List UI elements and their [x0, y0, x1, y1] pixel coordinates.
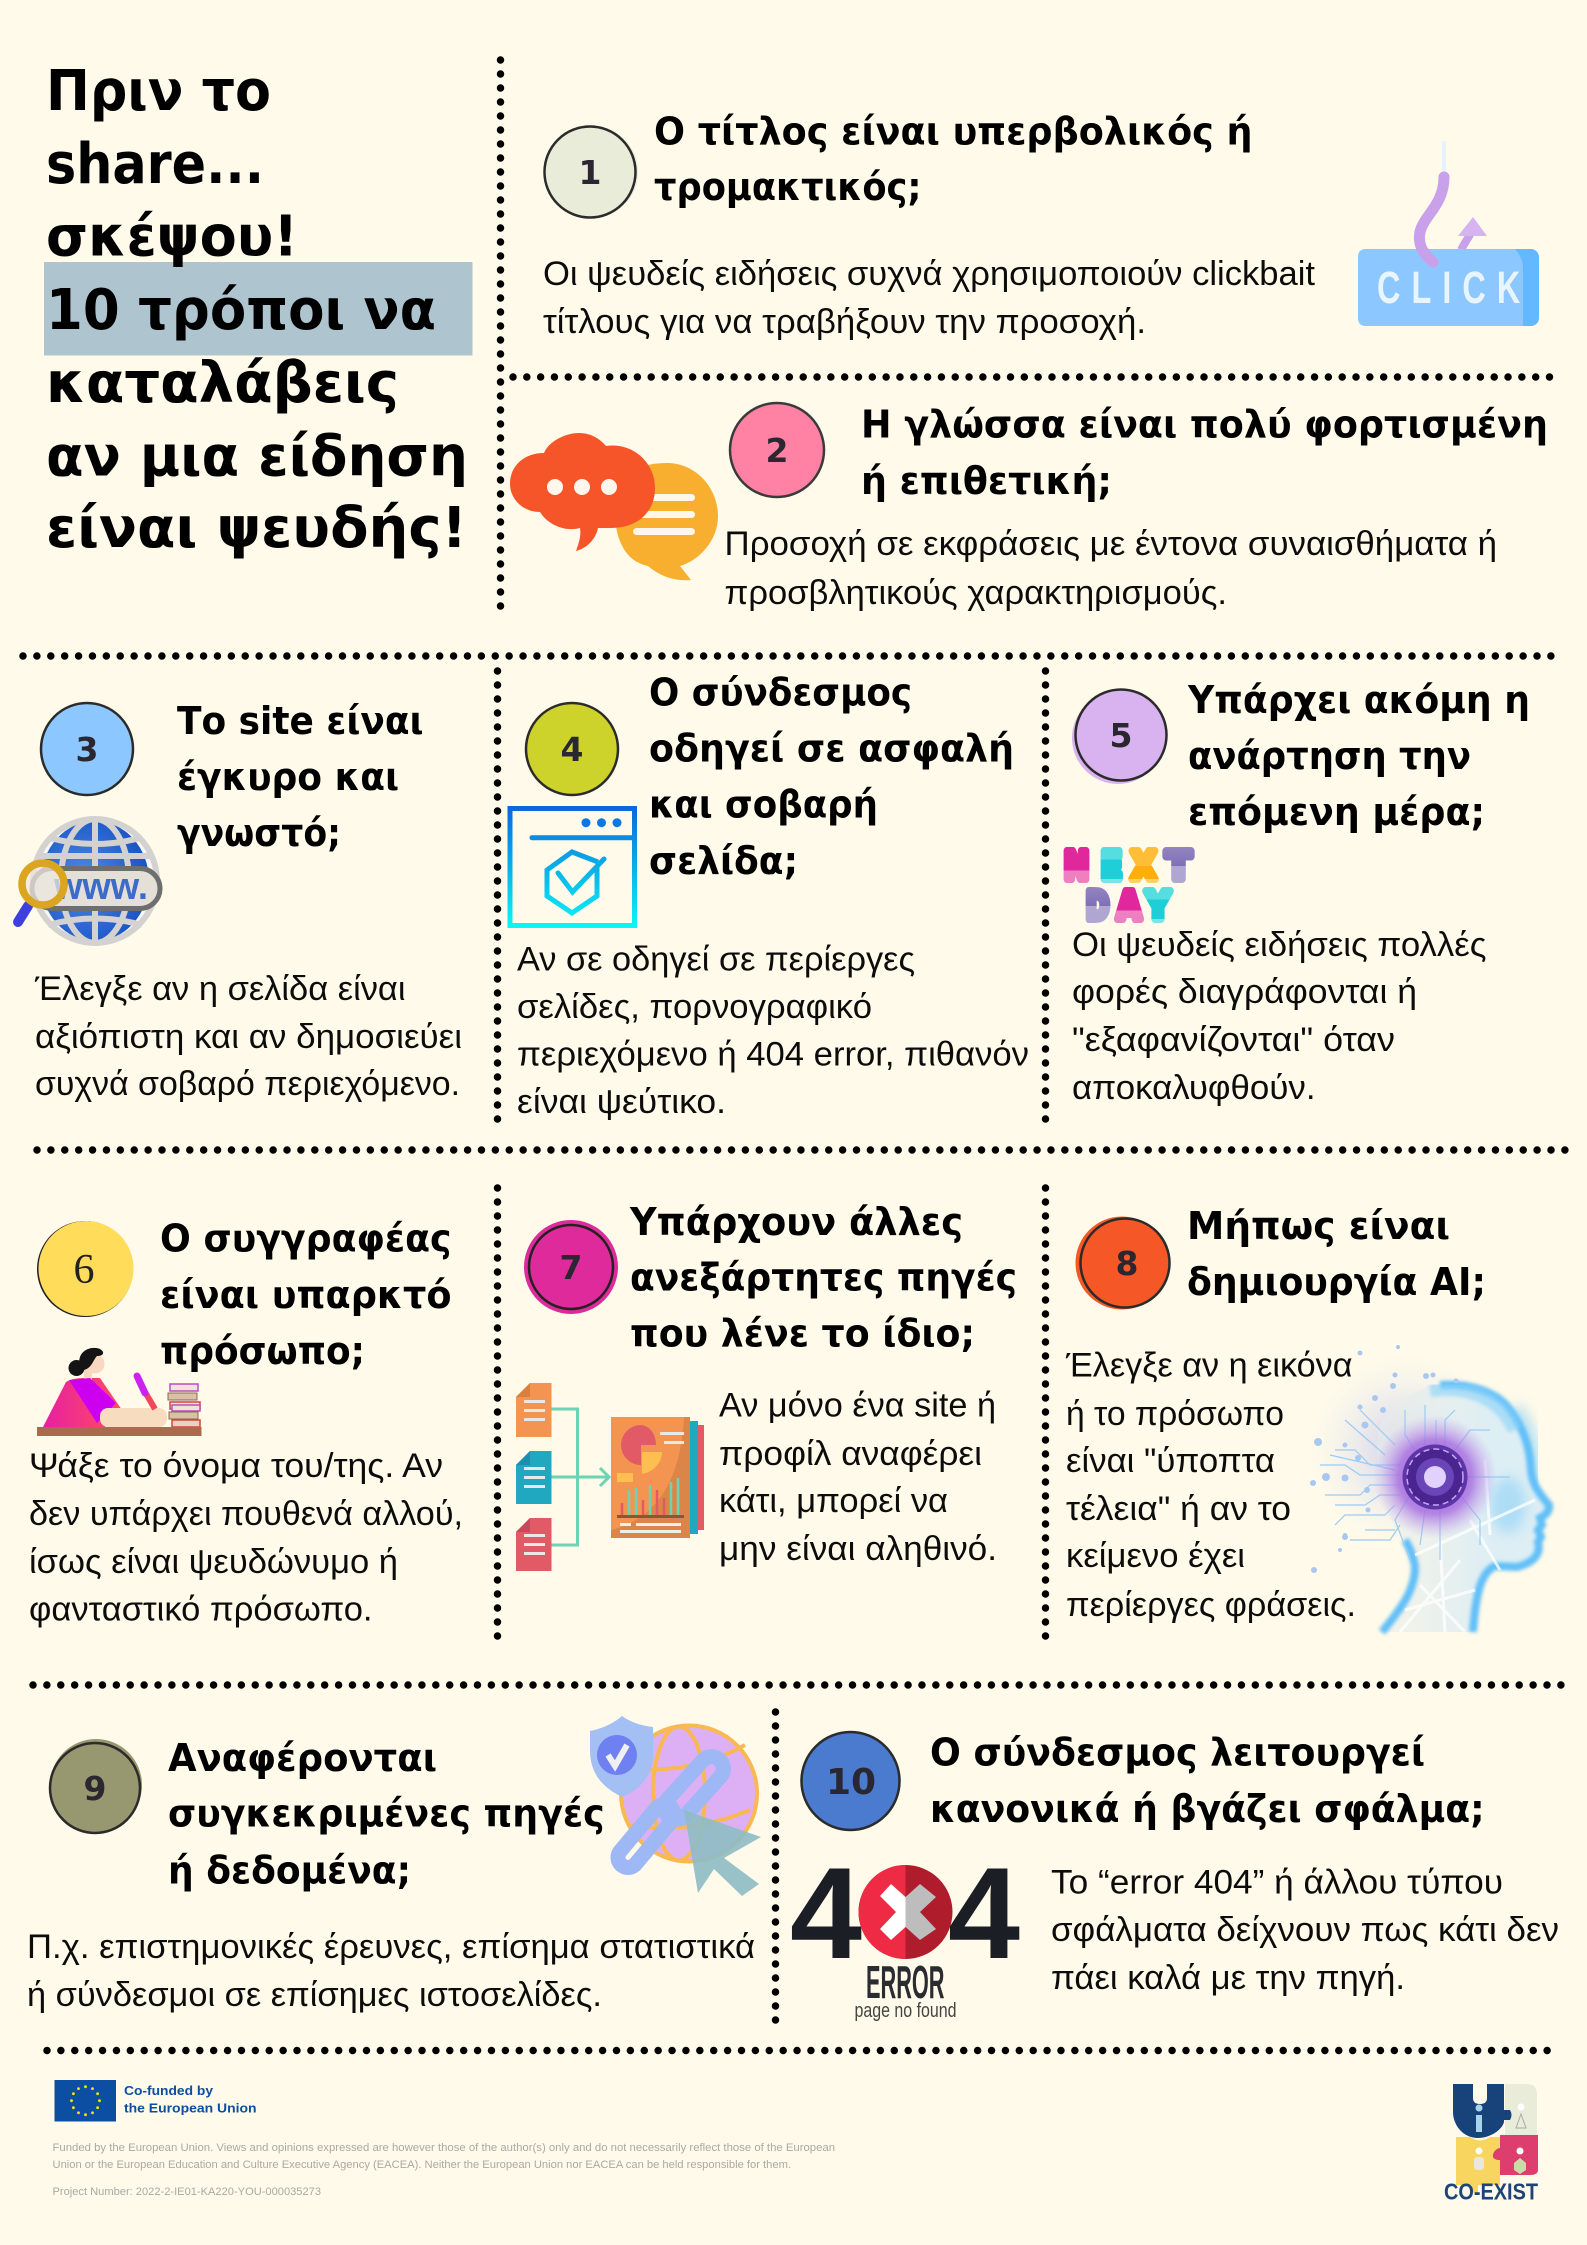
panel: tip 8	[1065, 1204, 1549, 1632]
heading 9: συγκεκριμένες πηγές	[168, 1792, 605, 1837]
icon: next day lettering: D	[1086, 884, 1109, 928]
heading 5: ανάρτηση την	[1188, 734, 1471, 779]
body 8: περίεργες φράσεις.	[1066, 1586, 1356, 1624]
body 4: περιεχόμενο ή 404 error, πιθανόν	[517, 1036, 1029, 1074]
body 8: Έλεγξε αν η εικόνα	[1065, 1347, 1352, 1385]
title text: 10 τρόποι να	[46, 278, 436, 343]
icon: next day lettering	[1064, 844, 1191, 928]
heading 6: πρόσωπο;	[160, 1329, 365, 1374]
body 7: μην είναι αληθινό.	[719, 1530, 997, 1568]
body 3: αξιόπιστη και αν δημοσιεύει	[35, 1018, 462, 1056]
heading 8: Μήπως είναι	[1187, 1204, 1450, 1249]
heading 10: Ο σύνδεσμος λειτουργεί	[930, 1730, 1425, 1775]
heading 8	[1187, 1204, 1486, 1305]
heading 4: σελίδα;	[649, 839, 798, 884]
icon: next day lettering: Y	[1145, 884, 1170, 928]
icon: next day lettering: T	[1166, 844, 1191, 888]
panel: tip 7	[516, 1200, 1017, 1571]
panel: tip 3	[18, 699, 462, 1103]
title text: είναι ψευδής!	[46, 496, 467, 561]
panel: tip 1	[543, 110, 1539, 341]
icon: 404 error: page no found	[854, 2000, 956, 2022]
heading 9: Αναφέρονται	[168, 1736, 437, 1781]
heading 2	[861, 402, 1548, 504]
icon: click hook	[1358, 141, 1539, 326]
heading 4: οδηγεί σε ασφαλή	[649, 727, 1014, 772]
icon: woman writing at desk	[37, 1348, 202, 1436]
title text: καταλάβεις	[46, 351, 399, 416]
footer	[52, 2080, 1538, 2204]
body 7: Αν μόνο ένα site ή	[719, 1387, 996, 1425]
heading 1: Ο τίτλος είναι υπερβολικός ή	[654, 110, 1252, 155]
badge 1: 1	[579, 153, 601, 192]
icon: 404 error: 4	[948, 1840, 1020, 1986]
icon: click hook: CLICK	[1377, 264, 1520, 313]
icon: AI head	[1310, 1345, 1549, 1632]
panel: tip 5	[1064, 678, 1530, 1107]
icon: chain link, shield and cursor	[590, 1716, 761, 1896]
body 6: Ψάξε το όνομα του/της. Αν	[29, 1447, 443, 1485]
co-funded label: Co-funded by	[124, 2083, 214, 2098]
heading 7: ανεξάρτητες πηγές	[630, 1256, 1017, 1301]
icon: next day lettering: A	[1117, 884, 1141, 928]
icon: documents feeding into report	[516, 1383, 704, 1571]
badge 4: 4	[561, 730, 583, 769]
body 7: προφίλ αναφέρει	[719, 1435, 982, 1473]
body 10	[1051, 1864, 1559, 1997]
disclaimer: Union or the European Education and Culture Executive Agency (EACEA). Neither the European Union nor EACEA can be held responsible for them.	[52, 2159, 791, 2171]
heading 7: Υπάρχουν άλλες	[629, 1200, 963, 1245]
body 7	[719, 1387, 997, 1568]
badge 8	[1076, 1216, 1170, 1310]
heading 9	[168, 1736, 605, 1894]
title text: share...	[46, 132, 264, 197]
badge 2: 2	[766, 431, 788, 470]
body 8: ή το πρόσωπο	[1066, 1395, 1284, 1433]
panel: tip 6	[29, 1217, 463, 1629]
body 6	[29, 1447, 463, 1629]
heading 1	[654, 110, 1252, 210]
badge 1	[544, 126, 638, 218]
badge 10: 10	[826, 1762, 876, 1803]
body 2	[724, 525, 1497, 612]
badge 4	[526, 703, 618, 795]
heading 5: επόμενη μέρα;	[1188, 790, 1485, 835]
heading 7: που λένε το ίδιο;	[630, 1312, 975, 1357]
title text: Πριν το	[46, 59, 271, 124]
heading 7	[629, 1200, 1017, 1357]
heading 10	[930, 1730, 1485, 1832]
badge 7: 7	[560, 1248, 582, 1287]
body 9: Π.χ. επιστημονικές έρευνες, επίσημα στατιστικά	[27, 1928, 755, 1966]
heading 9: ή δεδομένα;	[168, 1849, 411, 1894]
heading 2: Η γλώσσα είναι πολύ φορτισμένη	[861, 402, 1548, 448]
badge 5: 5	[1110, 716, 1132, 755]
icon: speech bubbles	[510, 433, 718, 580]
body 10: πάει καλά με την πηγή.	[1051, 1959, 1405, 1997]
heading 10: κανονικά ή βγάζει σφάλμα;	[930, 1787, 1485, 1832]
body 8	[1065, 1347, 1356, 1624]
heading 3: έγκυρο και	[177, 755, 399, 800]
body 8: κείμενο έχει	[1066, 1537, 1245, 1575]
body 3: Έλεγξε αν η σελίδα είναι	[34, 970, 406, 1008]
title	[44, 59, 472, 561]
logo: CO-EXIST puzzle: CO-EXIST	[1444, 2178, 1538, 2204]
body 10: Το “error 404” ή άλλου τύπου	[1051, 1864, 1503, 1902]
heading 8: δημιουργία AI;	[1187, 1260, 1486, 1305]
icon: 404 error: ERROR	[866, 1956, 944, 2008]
icon: www globe with magnifier: www.	[53, 866, 148, 908]
heading 3: Το site είναι	[177, 699, 424, 744]
heading 6: Ο συγγραφέας	[160, 1217, 452, 1262]
co-funded label	[124, 2083, 257, 2116]
heading 2: ή επιθετική;	[861, 459, 1112, 504]
badge 6	[37, 1221, 134, 1317]
body 4	[517, 941, 1029, 1121]
badge 7	[524, 1220, 618, 1314]
icon: 404 error	[790, 1840, 1020, 2022]
badge 9	[50, 1739, 142, 1833]
heading 4	[649, 671, 1014, 884]
logo: EU flag	[54, 2080, 116, 2122]
panel: tip 2	[510, 402, 1548, 612]
badge 9: 9	[84, 1769, 106, 1808]
body 3: συχνά σοβαρό περιεχόμενο.	[35, 1065, 460, 1103]
body 9	[27, 1928, 755, 2014]
body 6: φανταστικό πρόσωπο.	[29, 1591, 372, 1629]
badge 3	[41, 703, 133, 795]
body 5: Οι ψευδείς ειδήσεις πολλές	[1072, 926, 1486, 964]
title text: αν μια είδηση	[46, 424, 468, 490]
disclaimer	[52, 2142, 835, 2198]
panel: tip 4	[510, 671, 1029, 1121]
panel: tip 9	[27, 1716, 761, 2014]
body 5: αποκαλυφθούν.	[1072, 1069, 1316, 1107]
heading 3	[177, 699, 424, 856]
icon: next day lettering: E	[1101, 844, 1122, 888]
body 4: Αν σε οδηγεί σε περίεργες	[517, 941, 915, 979]
body 7: κάτι, μπορεί να	[719, 1482, 948, 1520]
heading 3: γνωστό;	[177, 811, 341, 856]
badge 10	[802, 1732, 900, 1830]
body 8: τέλεια" ή αν το	[1066, 1490, 1291, 1528]
body 10: σφάλματα δείχνουν πως κάτι δεν	[1051, 1911, 1559, 1949]
icon: www globe with magnifier	[18, 817, 160, 945]
icon: next day lettering: N	[1064, 844, 1089, 888]
heading 4: Ο σύνδεσμος	[649, 671, 912, 716]
body 5: "εξαφανίζονται" όταν	[1072, 1021, 1395, 1059]
disclaimer: Funded by the European Union. Views and opinions expressed are however those of the author(s) only and do not necessarily reflect those of the European	[52, 2142, 835, 2154]
panel: tip 10	[790, 1730, 1559, 2022]
body 3	[34, 970, 462, 1103]
body 9: ή σύνδεσμοι σε επίσημες ιστοσελίδες.	[27, 1976, 602, 2014]
co-funded label: the European Union	[124, 2100, 257, 2116]
title text: σκέψου!	[46, 204, 298, 270]
badge 5	[1072, 690, 1166, 784]
body 6: ίσως είναι ψευδώνυμο ή	[29, 1543, 398, 1581]
body 4: σελίδες, πορνογραφικό	[517, 988, 872, 1026]
body 4: είναι ψεύτικο.	[517, 1083, 726, 1121]
body 5	[1072, 926, 1486, 1107]
badge 2	[730, 403, 824, 497]
body 1	[543, 255, 1316, 341]
icon: secure page window	[510, 808, 634, 926]
badge 3: 3	[76, 730, 98, 769]
heading 6: είναι υπαρκτό	[160, 1273, 452, 1318]
body 5: φορές διαγράφονται ή	[1072, 973, 1417, 1011]
title text	[46, 59, 468, 561]
heading 5	[1187, 678, 1530, 835]
badge 8: 8	[1116, 1244, 1138, 1283]
heading 6	[160, 1217, 452, 1374]
heading 5: Υπάρχει ακόμη η	[1187, 678, 1530, 723]
logo: CO-EXIST puzzle	[1444, 2084, 1538, 2204]
heading 4: και σοβαρή	[649, 783, 878, 828]
body 2: Προσοχή σε εκφράσεις με έντονα συναισθήματα ή	[724, 525, 1497, 563]
disclaimer: Project Number: 2022-2-IE01-KA220-YOU-000035273	[52, 2186, 321, 2198]
body 1: Οι ψευδείς ειδήσεις συχνά χρησιμοποιούν clickbait	[543, 255, 1316, 293]
body 1: τίτλους για να τραβήξουν την προσοχή.	[543, 303, 1146, 341]
title highlight	[44, 262, 472, 356]
badge 6: 6	[74, 1247, 94, 1293]
icon: next day lettering: X	[1131, 844, 1156, 888]
body 2: προσβλητικούς χαρακτηρισμούς.	[724, 574, 1227, 612]
body 8: είναι "ύποπτα	[1066, 1442, 1275, 1480]
heading 1: τρομακτικός;	[654, 165, 922, 210]
body 6: δεν υπάρχει πουθενά αλλού,	[29, 1495, 463, 1533]
icon: 404 error: 4	[790, 1840, 862, 1986]
